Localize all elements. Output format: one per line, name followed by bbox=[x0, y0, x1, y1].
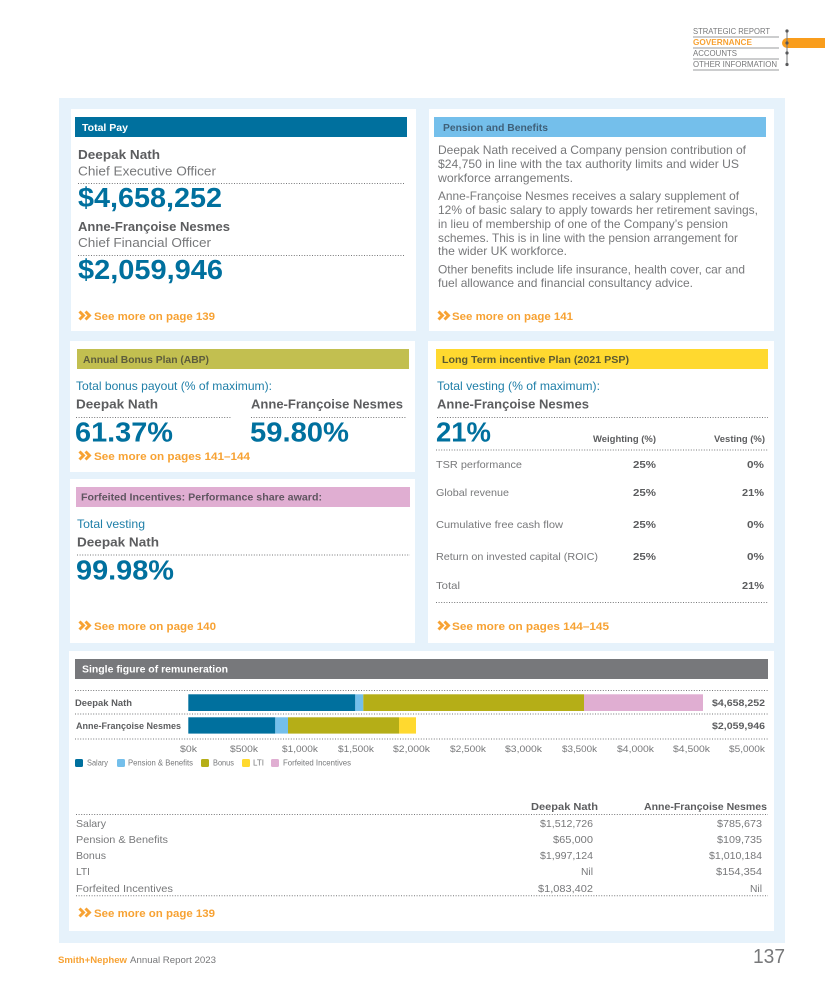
heading: pension and benefits bbox=[434, 117, 766, 137]
link: see more page 141: See more on page 141 bbox=[452, 311, 573, 323]
stat: LTIP vesting: Anne-Françoise Nesmes bbox=[437, 397, 589, 412]
table: LTIP measures: Vesting (%) bbox=[714, 434, 765, 445]
heading: forfeited incentives bbox=[76, 487, 410, 507]
chart legend bbox=[75, 758, 351, 767]
stat: Deepak Nath bonus: Deepak Nath bbox=[76, 397, 158, 412]
text: pension paragraph one bbox=[437, 143, 747, 185]
table: LTIP measures: 25% bbox=[633, 519, 657, 531]
table: LTIP measures: 25% bbox=[633, 551, 657, 563]
CEO pay bbox=[78, 147, 404, 213]
x axis labels: $1,500k bbox=[338, 744, 374, 755]
footer: Smith+Nephew bbox=[58, 955, 128, 966]
table: remuneration breakdown: Salary bbox=[76, 818, 107, 830]
x axis labels: $2,500k bbox=[450, 744, 486, 755]
section navigation: ACCOUNTS bbox=[693, 48, 737, 58]
table: remuneration breakdown: $109,735 bbox=[717, 834, 762, 846]
table: LTIP measures: Weighting (%) bbox=[593, 434, 656, 445]
chart legend: Pension & Benefits bbox=[128, 758, 193, 767]
x axis labels: $500k bbox=[230, 744, 258, 755]
table: remuneration breakdown bbox=[76, 801, 768, 896]
x axis labels: $5,000k bbox=[729, 744, 765, 755]
text: other benefits: fuel allowance and financial consultancy advice. bbox=[438, 276, 693, 290]
stat: LTIP vesting: Total vesting (% of maximum): bbox=[437, 379, 600, 393]
panel: single figure of remuneration bbox=[69, 651, 774, 931]
bar: Anne-Françoise Nesmes bbox=[76, 717, 765, 734]
table: remuneration breakdown: $154,354 bbox=[716, 866, 762, 878]
stacked bar chart bbox=[75, 690, 768, 767]
table: LTIP measures: 25% bbox=[633, 459, 657, 471]
table: remuneration breakdown: $785,673 bbox=[717, 818, 762, 830]
bar: Deepak Nath: $4,658,252 bbox=[712, 698, 765, 708]
table: LTIP measures: Global revenue bbox=[436, 487, 509, 499]
heading: total pay: Total Pay bbox=[82, 122, 128, 134]
link: see more pages 144-145: See more on pages 144–145 bbox=[452, 621, 609, 633]
panel: long term incentive plan bbox=[428, 341, 774, 643]
panel: total pay bbox=[71, 109, 416, 331]
chart legend: Forfeited Incentives bbox=[283, 758, 351, 767]
text: other benefits: Other benefits include life insurance, health cover, car and bbox=[438, 262, 745, 276]
table: remuneration breakdown: Anne-Françoise Nesmes bbox=[644, 801, 767, 813]
x axis labels: $1,000k bbox=[282, 744, 318, 755]
heading: total pay bbox=[75, 117, 407, 137]
table: LTIP measures bbox=[436, 434, 768, 602]
panel: pension and benefits bbox=[429, 109, 774, 331]
table: remuneration breakdown: Bonus bbox=[76, 850, 106, 862]
table: remuneration breakdown: LTI bbox=[76, 866, 90, 878]
link: see more page 139: See more on page 139 bbox=[94, 311, 215, 323]
x axis labels bbox=[180, 744, 765, 755]
table: LTIP measures: Cumulative free cash flow bbox=[436, 519, 563, 531]
link: see more page 140: See more on page 140 bbox=[94, 621, 216, 633]
footer: Annual Report 2023 bbox=[130, 955, 216, 966]
text: pension paragraph two: Anne-Françoise Nesmes receives a salary supplement of bbox=[438, 189, 740, 203]
text: pension paragraph two: schemes. This is in line with the pension arrangement for bbox=[438, 231, 738, 245]
text: pension paragraph one: $24,750 in line with the tax authority limits and wider US bbox=[438, 157, 739, 171]
section navigation: GOVERNANCE bbox=[693, 37, 752, 47]
section navigation: STRATEGIC REPORT bbox=[693, 26, 770, 36]
bar: Anne-Françoise Nesmes: Anne-Françoise Nesmes bbox=[76, 721, 181, 731]
x axis labels: $0k bbox=[180, 744, 197, 755]
stat: LTIP vesting bbox=[436, 379, 768, 448]
CEO pay: Deepak Nath bbox=[78, 147, 160, 162]
text: pension paragraph two: the wider UK workforce. bbox=[438, 244, 567, 258]
stat: LTIP vesting: 21% bbox=[436, 417, 491, 448]
link: see more pages 141-144: See more on pages 141–144 bbox=[94, 451, 251, 463]
stat: Anne-Françoise Nesmes bonus bbox=[250, 397, 407, 448]
footer bbox=[58, 946, 785, 968]
stat: Deepak Nath bonus: 61.37% bbox=[75, 416, 173, 448]
table: remuneration breakdown: $1,997,124 bbox=[540, 850, 593, 862]
table: LTIP measures: 0% bbox=[747, 551, 765, 563]
table: remuneration breakdown: Forfeited Incentives bbox=[76, 883, 173, 895]
chart legend: Salary bbox=[87, 758, 108, 767]
x axis labels: $4,000k bbox=[617, 744, 654, 755]
bar: Deepak Nath bbox=[75, 694, 765, 711]
section navigation bbox=[693, 26, 825, 70]
text: pension paragraph two bbox=[438, 189, 758, 258]
text: pension paragraph one: Deepak Nath received a Company pension contribution of bbox=[438, 143, 747, 157]
stat: forfeited vesting bbox=[76, 517, 410, 585]
panel: annual bonus plan bbox=[70, 341, 415, 472]
table: remuneration breakdown: Pension & Benefits bbox=[76, 834, 168, 846]
heading: single figure of remuneration bbox=[75, 659, 768, 679]
CEO pay: Chief Executive Officer bbox=[78, 164, 217, 178]
table: remuneration breakdown: $1,010,184 bbox=[709, 850, 762, 862]
table: LTIP measures: Total bbox=[436, 580, 460, 592]
table: remuneration breakdown: Nil bbox=[750, 883, 762, 895]
section navigation: OTHER INFORMATION bbox=[693, 59, 777, 69]
page background panel bbox=[59, 98, 785, 943]
table: LTIP measures: 21% bbox=[742, 580, 765, 592]
x axis labels: $4,500k bbox=[673, 744, 710, 755]
CFO pay: Anne-Françoise Nesmes bbox=[78, 219, 230, 234]
stat: Anne-Françoise Nesmes bonus: Anne-Françoise Nesmes bbox=[251, 397, 403, 412]
heading: long term incentive plan: Long Term incentive Plan (2021 PSP) bbox=[442, 354, 629, 366]
chart legend: LTI bbox=[253, 758, 264, 767]
x axis labels: $3,000k bbox=[505, 744, 542, 755]
table: remuneration breakdown: $1,083,402 bbox=[538, 883, 593, 895]
CFO pay bbox=[78, 219, 404, 285]
CFO pay: $2,059,946 bbox=[78, 254, 223, 285]
heading: annual bonus plan: Annual Bonus Plan (ABP) bbox=[83, 354, 209, 366]
link: see more page 139: See more on page 139 bbox=[94, 908, 215, 920]
table: remuneration breakdown: Nil bbox=[581, 866, 593, 878]
text: pension paragraph one: workforce arrangements. bbox=[437, 171, 573, 185]
table: LTIP measures: TSR performance bbox=[436, 459, 522, 471]
table: remuneration breakdown: $1,512,726 bbox=[540, 818, 593, 830]
chart legend: Bonus bbox=[213, 758, 234, 767]
x axis labels: $3,500k bbox=[562, 744, 597, 755]
table: LTIP measures: 0% bbox=[747, 459, 765, 471]
stat: forfeited vesting: Deepak Nath bbox=[77, 535, 159, 550]
table: remuneration breakdown: $65,000 bbox=[553, 834, 593, 846]
heading: forfeited incentives: Forfeited Incentives: Performance share award: bbox=[81, 492, 322, 504]
stat: forfeited vesting: 99.98% bbox=[76, 554, 174, 585]
stat: Deepak Nath bonus bbox=[75, 397, 232, 448]
CEO pay: $4,658,252 bbox=[78, 182, 222, 213]
text: other benefits bbox=[438, 262, 745, 290]
table: LTIP measures: 25% bbox=[633, 487, 657, 499]
stat: Anne-Françoise Nesmes bonus: 59.80% bbox=[250, 416, 349, 448]
bar: Deepak Nath: Deepak Nath bbox=[75, 698, 132, 708]
x axis labels: $2,000k bbox=[393, 744, 430, 755]
panel: forfeited incentives bbox=[70, 479, 415, 643]
CFO pay: Chief Financial Officer bbox=[78, 235, 212, 250]
stat: forfeited vesting: Total vesting bbox=[77, 517, 145, 531]
bar: Anne-Françoise Nesmes: $2,059,946 bbox=[712, 721, 765, 731]
heading: pension and benefits: Pension and Benefits bbox=[443, 122, 548, 134]
heading: annual bonus plan bbox=[77, 349, 409, 369]
text: pension paragraph two: in lieu of membership of one of the Company’s pension bbox=[438, 217, 728, 231]
text: pension paragraph two: 12% of basic salary to apply towards her retirement savings, bbox=[438, 203, 758, 217]
table: LTIP measures: 21% bbox=[742, 487, 765, 499]
table: remuneration breakdown: Deepak Nath bbox=[531, 801, 598, 813]
table: LTIP measures: 0% bbox=[747, 519, 765, 531]
heading: long term incentive plan bbox=[436, 349, 768, 369]
footer: 137 bbox=[753, 946, 785, 968]
heading: single figure of remuneration: Single figure of remuneration bbox=[82, 664, 228, 676]
table: LTIP measures: Return on invested capital (ROIC) bbox=[436, 551, 598, 563]
text: total bonus payout: Total bonus payout (% of maximum): bbox=[76, 379, 272, 393]
